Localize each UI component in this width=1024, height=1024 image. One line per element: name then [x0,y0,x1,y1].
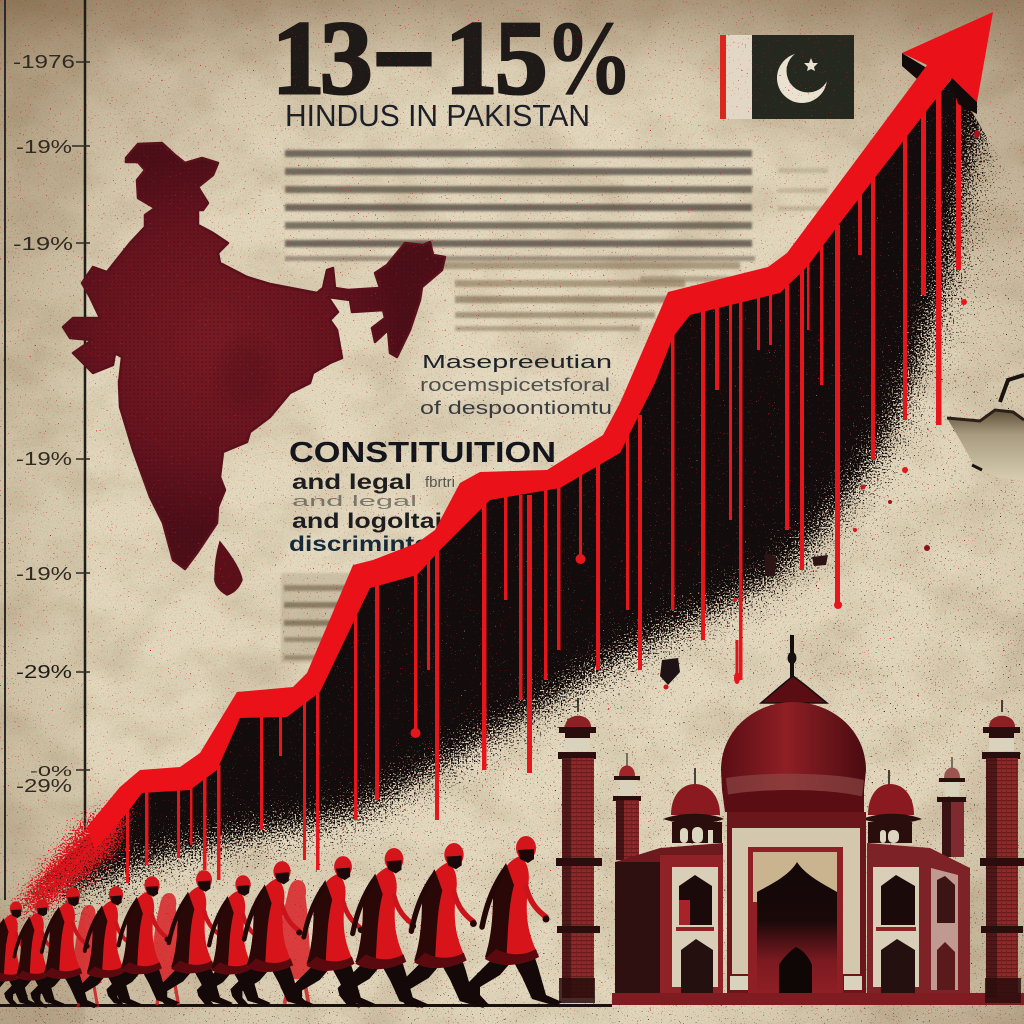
body copy: garbled notes: rocemspicetsforal [420,375,610,395]
left minaret [556,698,602,1003]
subheading: HINDUS IN PAKISTAN [285,98,590,133]
y axis with percentage labels: -19% [16,564,72,584]
y axis with percentage labels: -19% [13,234,73,254]
body copy: garbled notes: Masepreeutian [422,352,612,372]
figure: walker 4 [290,856,375,1007]
redacted article lines [285,150,828,331]
map: dark stain [219,341,271,409]
right minaret [980,700,1024,1003]
y axis with percentage labels: -19% [16,137,72,157]
left side dome [663,768,724,843]
chart: rising red trend line with arrow [87,12,993,850]
marching line of red robed figures [0,836,562,1008]
body copy: garbled notes: of despoontiomtu [420,398,612,418]
ground strip [612,993,1024,1005]
body copy: legal discrimination: and legal [292,493,417,510]
main dome [721,635,866,812]
map: Sri Lanka [215,542,242,595]
red splatter and torn specks [660,130,980,690]
small left minaret [613,753,641,860]
body copy: garbled notes [420,352,612,418]
figure: walker 5 [230,861,313,1007]
y axis with percentage labels: -19% [16,449,72,469]
headline statistic: % [545,0,633,116]
right side dome [862,770,922,843]
ground line [0,1004,612,1007]
central portal [727,812,866,993]
figure: walker 11 [4,899,65,1006]
headline statistic: 15 [445,0,548,116]
figure: walker 2 [396,843,489,1008]
figure: ghost 2 [149,893,183,1005]
body copy: legal discrimination: and legal [292,471,412,494]
line and arrowhead [87,12,993,850]
figure: ghost 1 [276,880,313,1004]
body copy: legal discrimination: and logoltai [292,510,442,533]
section heading: constitution: CONSTITUITION [289,437,556,469]
figure: walker 6 [197,875,271,1006]
figure: walker 3 [338,848,428,1008]
y axis with percentage labels: -29% [16,662,72,682]
y axis with percentage labels: -1976 [13,52,75,72]
Taj Mahal style building [556,635,1024,1005]
headline statistic: 13 [272,0,372,116]
chart: red drips [126,80,961,883]
figure: walker 1 [466,836,562,1006]
body copy: legal discrimination: fbrtri [425,474,455,491]
chart: red speckle at line start [15,802,132,918]
figure: walker 7 [156,870,233,1006]
arrowhead shadow [902,53,977,114]
icon: Pakistan flag [720,35,854,119]
headline statistic: – [380,0,428,101]
left wing [615,843,723,993]
figure: walker 10 [30,887,99,1008]
y axis with percentage labels: -0% [30,763,72,780]
map of India [63,143,445,595]
figure: walker 12 [0,901,38,1007]
small right minaret [937,757,966,857]
right wing [867,843,970,993]
body copy: legal discrimination [289,471,455,556]
y axis with percentage labels: -29% [16,776,72,796]
body copy: legal discrimination: discriminter [289,533,439,556]
torn paper patch [947,375,1024,480]
faded article block lower left [281,573,353,663]
figure: walker 8 [106,876,179,1005]
figure: walker 9 [73,886,142,1007]
map: main landmass and north-east [63,143,445,569]
headline statistic [272,0,633,116]
map: halftone texture [63,143,445,569]
figure: ghost 3 [70,905,101,1007]
y axis with percentage labels [5,0,90,900]
